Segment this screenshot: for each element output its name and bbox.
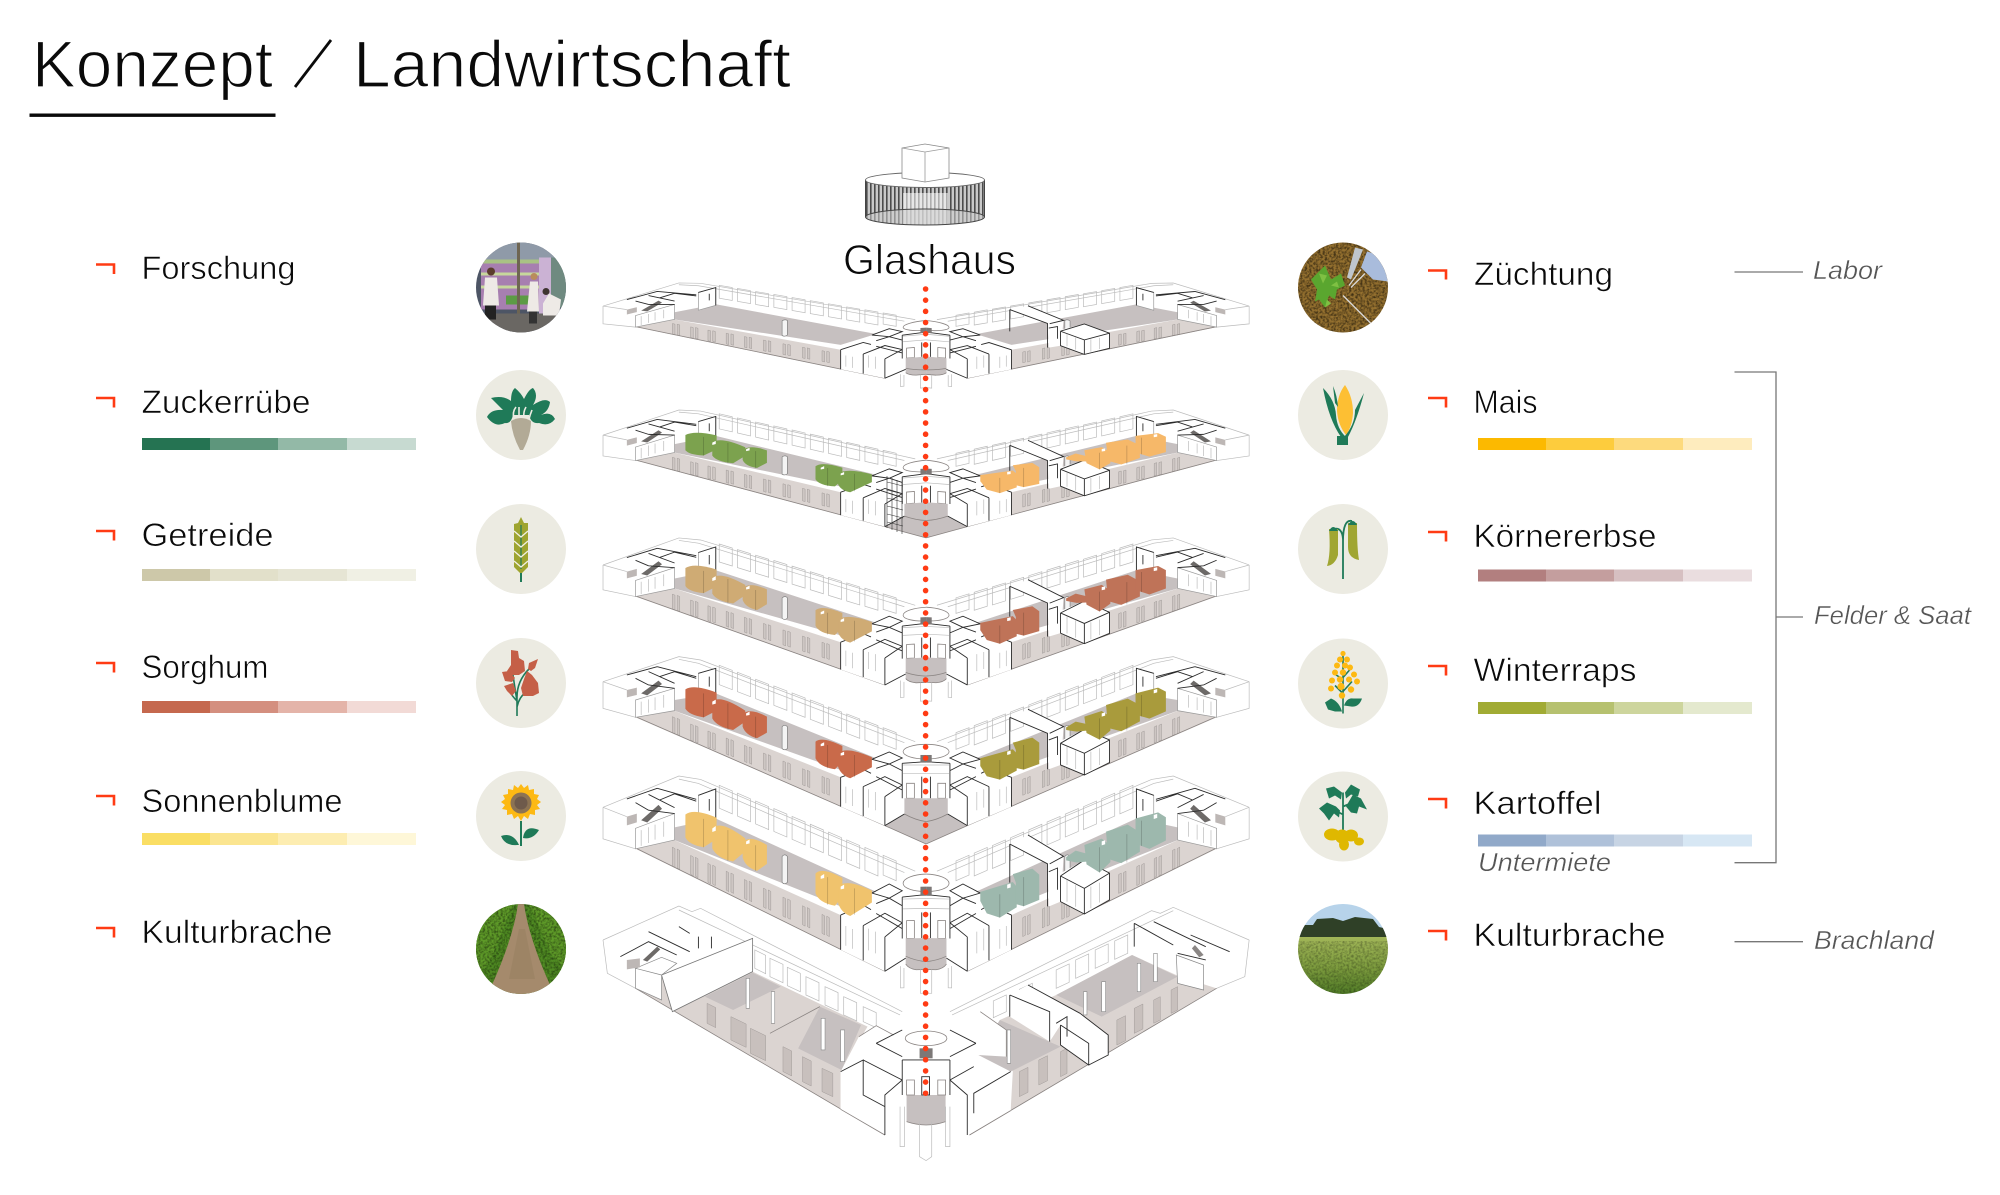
left legend: Kulturbrache: Kulturbrache xyxy=(142,914,332,950)
left legend: Getreide: Getreide xyxy=(142,517,274,553)
category: Labor: Labor xyxy=(1813,255,1883,285)
right legend: Winterraps: Winterraps xyxy=(1474,652,1636,688)
right legend: Kartoffel xyxy=(1428,785,1752,846)
category: Brachland: Brachland xyxy=(1814,925,1936,955)
crop blocks: tan xyxy=(685,557,872,651)
left legend: Sonnenblume xyxy=(96,783,416,845)
right legend: Mais xyxy=(1428,384,1752,450)
icon: Sorghum xyxy=(476,638,566,728)
right legend: Körnererbse: Körnererbse xyxy=(1474,518,1656,554)
title xyxy=(30,27,791,117)
floor 2: Zuckerruebe and Mais xyxy=(603,392,1249,562)
left legend: Sonnenblume: Sonnenblume xyxy=(142,783,342,819)
left legend: Sorghum: Sorghum xyxy=(142,649,268,685)
left legend: Forschung: Forschung xyxy=(142,250,296,286)
icon: Winterraps xyxy=(1298,638,1388,728)
crop blocks: sage xyxy=(980,808,1166,921)
floor 4: Sorghum and Winterraps xyxy=(603,657,1249,844)
crop blocks: green xyxy=(685,420,872,504)
right legend: Kartoffel: Kartoffel xyxy=(1474,785,1602,821)
left legend: Zuckerrübe: Zuckerrübe xyxy=(142,384,310,420)
icon: Körnererbse xyxy=(1298,504,1388,594)
left legend: Getreide xyxy=(96,517,416,581)
right legend: Kulturbrache: Kulturbrache xyxy=(1474,917,1666,953)
right legend: Körnererbse xyxy=(1428,518,1752,582)
right legend: Mais: Mais xyxy=(1474,384,1538,420)
right legend: Winterraps xyxy=(1428,652,1752,714)
photo: Kulturbrache Wiese xyxy=(1298,904,1388,995)
floor 3: Getreide and Koernererbse xyxy=(603,526,1249,717)
crop blocks: orange xyxy=(980,420,1166,505)
title: Landwirtschaft xyxy=(353,27,791,101)
left legend: Zuckerrübe xyxy=(96,384,416,450)
label: Untermiete: Untermiete xyxy=(1478,847,1611,877)
icon: Sonnenblume xyxy=(476,771,566,861)
floor 1: Forschung and Zuechtung xyxy=(603,262,1249,415)
icon: Getreide xyxy=(476,504,566,594)
floor 6: Kulturbrache xyxy=(603,906,1249,1161)
icon: Zuckerrübe xyxy=(476,370,566,460)
icon: Kartoffel xyxy=(1298,772,1388,862)
icon: Mais xyxy=(1298,370,1388,460)
photo: Züchtung xyxy=(1298,242,1388,332)
crop blocks: rose xyxy=(980,557,1166,652)
glasshouse model xyxy=(865,144,985,226)
heading: Glashaus: Glashaus xyxy=(843,236,1016,283)
title: Konzept xyxy=(32,27,273,101)
right legend: Züchtung: Züchtung xyxy=(1474,256,1613,292)
category bracket: Felder & Saat: Felder & Saat xyxy=(1814,600,1973,630)
red dotted axis xyxy=(923,289,928,1094)
crop blocks: olive xyxy=(980,688,1166,780)
crop blocks: terracotta xyxy=(685,687,872,778)
floor 5: Sonnenblume and Kartoffel xyxy=(603,770,1249,1001)
left legend: Sorghum xyxy=(96,649,416,713)
crop blocks: yellow xyxy=(685,808,872,920)
photo: Forschung xyxy=(476,242,566,332)
category bracket: Felder & Saat xyxy=(1734,372,1973,863)
photo: Kulturbrache Feldweg xyxy=(476,904,566,994)
